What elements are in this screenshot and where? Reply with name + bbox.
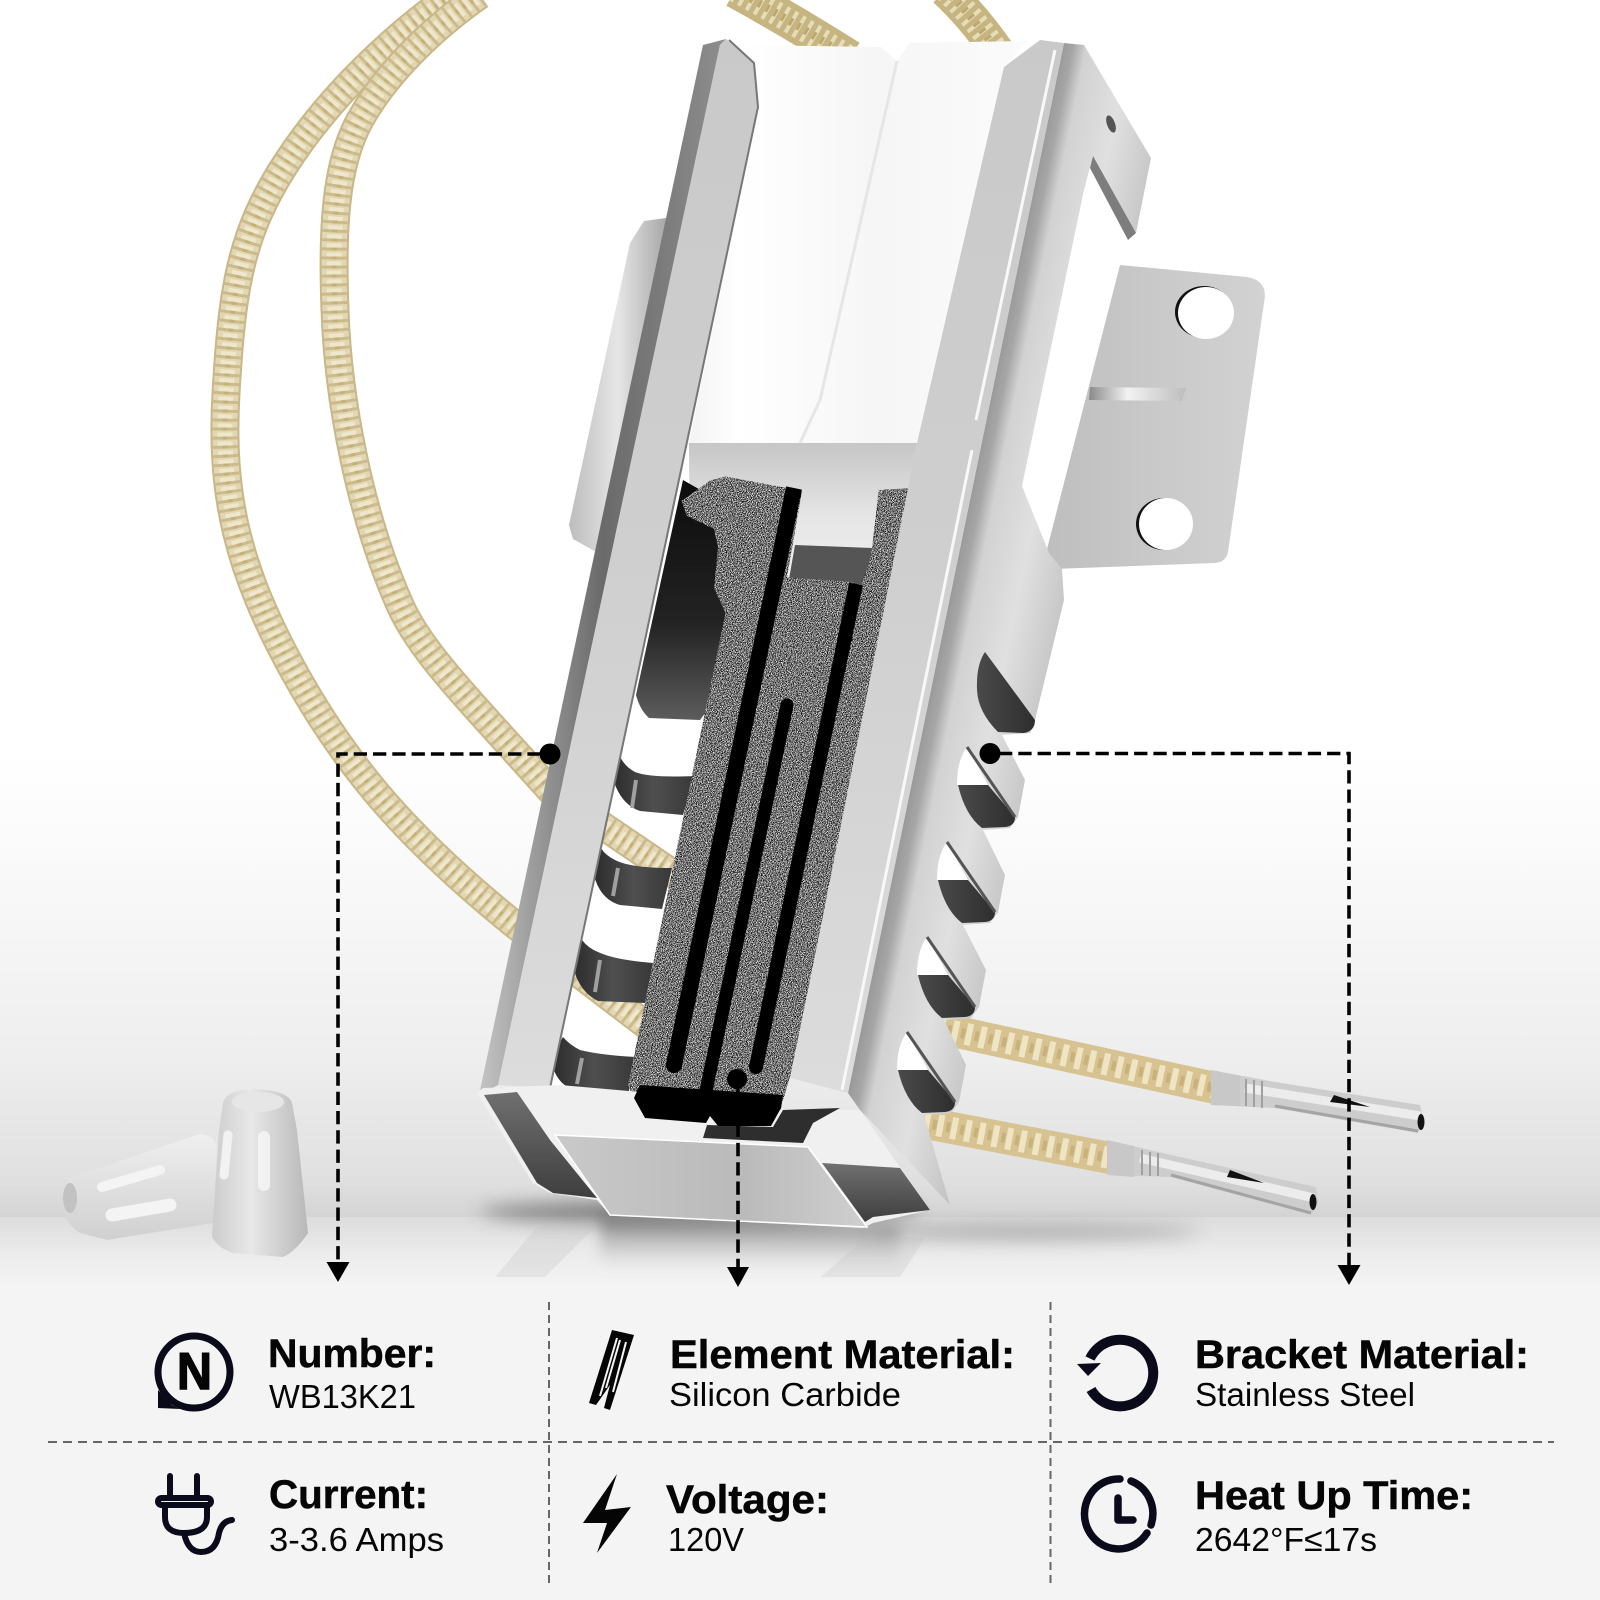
rail highlights [842,50,1055,1090]
left rail [479,39,758,1095]
right rail front face [791,40,1064,1093]
band 3 [574,940,653,1003]
mounting bracket [1046,265,1265,569]
floor surface [0,1217,1600,1600]
terminal lower [1107,1140,1318,1215]
ceramic block [689,41,1028,610]
value: 120V [668,1521,744,1558]
spec: element material [589,1330,1015,1413]
cable left outer [225,0,650,1028]
value: Stainless Steel [1195,1376,1415,1413]
center plate [555,1135,867,1227]
inner dark cavity [636,480,760,720]
bracket slot [1089,387,1186,401]
bracket hole upper [1175,286,1234,339]
louver 2 [957,747,1015,828]
icon: plug [158,1476,232,1552]
band 4 [553,1037,636,1095]
spec: heat up time [1084,1474,1473,1558]
louver 1 [977,652,1035,733]
terminals [1107,1070,1424,1215]
heading: Current: [269,1473,428,1517]
back mounting tab [569,218,666,553]
wire nut: lying [63,1134,217,1240]
heading: Element Material: [670,1333,1015,1377]
heading: Number: [268,1332,436,1376]
braided cables [225,0,1215,1158]
icon: N badge: N [177,1343,212,1401]
icon: clock [1084,1479,1153,1549]
cable top [735,0,998,58]
heading: Bracket Material: [1195,1333,1529,1377]
icon: lightning bolt [583,1474,631,1553]
louver 4 [917,937,975,1018]
inner louver bands [553,751,695,1095]
louver 3 [937,842,995,923]
icon: element [589,1330,634,1410]
element slots [666,488,856,1105]
spec table dividers [48,1302,1554,1583]
wire nuts [63,1089,308,1257]
heating element [628,476,911,1126]
wire nut: upright [212,1089,308,1257]
callout: number line [326,744,560,1282]
band 2 [595,848,672,909]
cable left inner [334,0,690,885]
value: 3-3.6 Amps [269,1521,444,1558]
top hole [1104,114,1118,134]
right opening [822,1163,930,1222]
floor shadow [480,1201,1200,1277]
spec: voltage [583,1474,829,1558]
black under element [703,1108,840,1143]
top fold line [1090,156,1136,240]
left opening [484,1092,597,1198]
band 1 [614,751,695,815]
side face with louvers [848,43,1151,1205]
value: 2642°F≤17s [1195,1521,1377,1558]
cable lower right 2 [910,1120,1110,1158]
louver 5 [897,1032,955,1113]
icon: N badge [158,1336,230,1409]
left rail front face [498,39,758,1088]
left rail outer strip [479,39,726,1095]
bracket hole lower [1136,498,1193,550]
terminal upper [1211,1070,1424,1133]
spec: bracket material [1077,1333,1529,1413]
heading: Heat Up Time: [1195,1474,1473,1518]
spec: current [158,1473,444,1558]
channel background [550,450,760,1095]
heading: Voltage: [666,1478,829,1522]
element body [628,476,911,1106]
value: Silicon Carbide [669,1376,901,1413]
callout: bracket line [980,743,1360,1285]
value: WB13K21 [269,1378,416,1415]
background [0,0,1600,1217]
spec: number [158,1332,436,1415]
callout: element line [727,1069,749,1287]
icon: rotate arrow [1077,1340,1153,1406]
cable lower right 1 [925,1025,1215,1088]
bottom end shell [477,1085,930,1228]
element base shadow [634,1085,783,1126]
